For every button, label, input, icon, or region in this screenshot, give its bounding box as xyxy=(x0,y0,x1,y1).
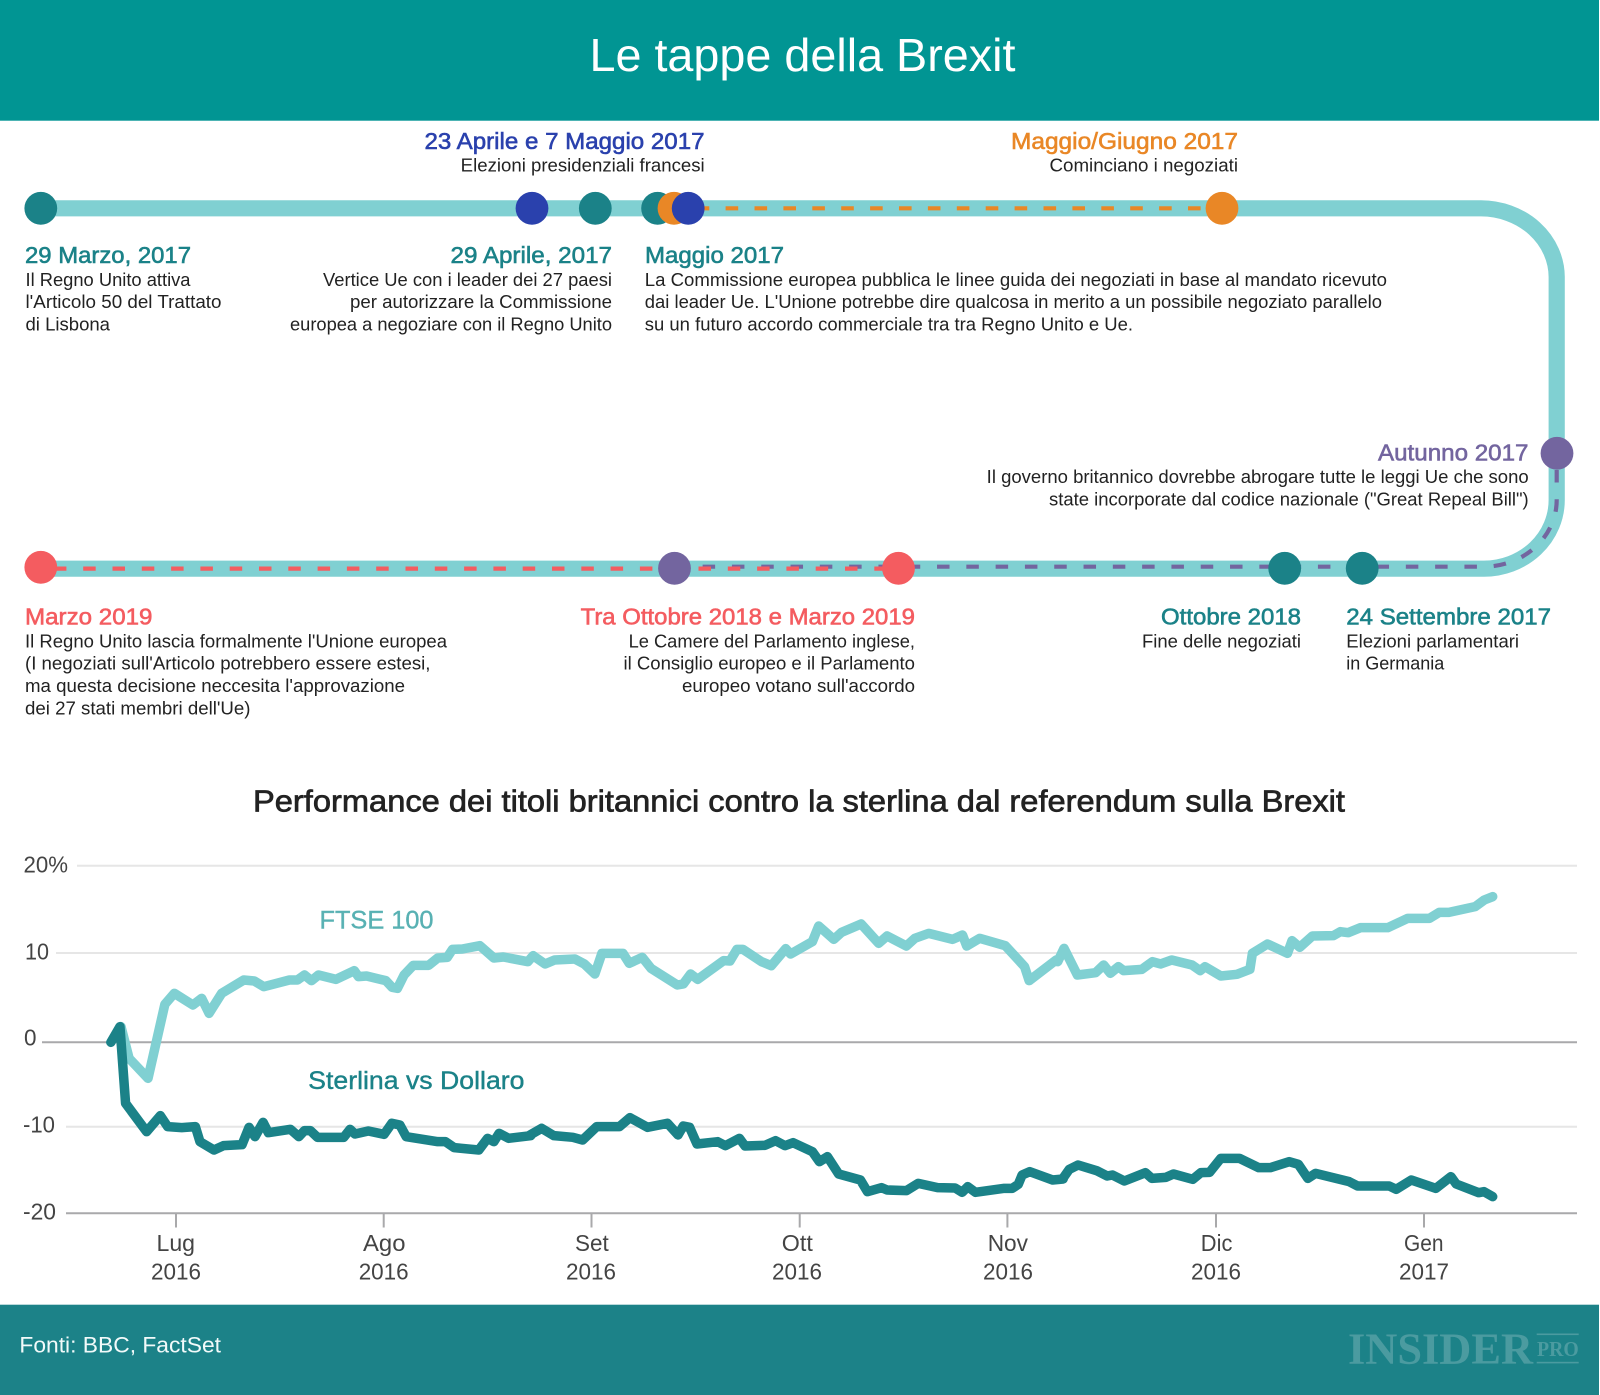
event: Autunno 2017: Autunno 2017 xyxy=(1378,440,1528,466)
x axis labels: Lug xyxy=(156,1230,195,1256)
x axis labels: Nov xyxy=(988,1230,1028,1256)
event: Marzo 2019: dei 27 stati membri dell'Ue) xyxy=(25,697,250,718)
event: Marzo 2019: ma questa decisione neccesita l'approvazione xyxy=(25,675,405,696)
event: 29 Aprile 2017: europea a negoziare con il Regno Unito xyxy=(290,314,612,334)
event: 29 Marzo 2017: 29 Marzo, 2017 xyxy=(25,242,191,268)
header band xyxy=(0,0,1599,121)
title: Le tappe della Brexit xyxy=(590,29,1016,81)
timeline track xyxy=(40,208,1557,569)
footer band xyxy=(0,1305,1599,1395)
x axis labels: 2016 xyxy=(983,1258,1033,1284)
event: Marzo 2019: Marzo 2019 xyxy=(25,603,152,629)
event: 24 Settembre 2017: 24 Settembre 2017 xyxy=(1346,603,1551,629)
event: Autunno 2017: Il governo britannico dovrebbe abrogare tutte le leggi Ue che sono xyxy=(987,466,1529,487)
event: Tra Ottobre 2018 e Marzo 2019 xyxy=(581,603,915,696)
x axis labels: Ago xyxy=(363,1230,406,1256)
event: Maggio 2017: Maggio 2017 xyxy=(645,242,784,268)
event: Ottobre 2018: Ottobre 2018 xyxy=(1161,603,1301,629)
timeline markers xyxy=(24,192,1573,585)
event: Marzo 2019 xyxy=(25,603,448,718)
y axis labels: 0 xyxy=(24,1025,36,1051)
series: Sterlina vs Dollaro xyxy=(111,1027,1493,1197)
line chart xyxy=(23,852,1577,1284)
event: Tra Ottobre 2018 e Marzo 2019: il Consiglio europeo e il Parlamento xyxy=(624,653,915,674)
event: 24 Settembre 2017: Elezioni parlamentari xyxy=(1346,630,1519,651)
event: 29 Marzo 2017: Il Regno Unito attiva xyxy=(26,269,191,290)
event: 29 Marzo 2017: l'Articolo 50 del Trattato xyxy=(26,291,221,312)
event: 23 Aprile e 7 Maggio 2017: Elezioni presidenziali francesi xyxy=(461,155,705,176)
x axis labels xyxy=(151,1230,1449,1284)
event: 29 Marzo 2017: di Lisbona xyxy=(26,314,111,334)
event: 23 Aprile e 7 Maggio 2017 xyxy=(424,128,705,176)
label: Sterlina vs Dollaro: Sterlina vs Dollaro xyxy=(308,1067,524,1095)
event: Maggio/Giugno 2017 xyxy=(1011,128,1238,176)
event: Marzo 2019: (I negoziati sull'Articolo potrebbero essere estesi, xyxy=(25,653,430,674)
event: Ottobre 2018 xyxy=(1142,603,1301,651)
event: Maggio 2017 xyxy=(645,242,1387,334)
event: Tra Ottobre 2018 e Marzo 2019: Tra Ottobre 2018 e Marzo 2019 xyxy=(581,603,915,629)
event: Ottobre 2018: Fine delle negoziati xyxy=(1142,630,1301,651)
event: 24 Settembre 2017: in Germania xyxy=(1346,653,1445,674)
logo: INSIDER PRO: INSIDER xyxy=(1348,1324,1534,1373)
event: Tra Ottobre 2018 e Marzo 2019: Le Camere del Parlamento inglese, xyxy=(629,630,915,651)
event: 29 Marzo 2017 xyxy=(25,242,221,334)
x axis labels: 2016 xyxy=(359,1258,409,1284)
event: 29 Aprile 2017: per autorizzare la Commissione xyxy=(350,291,612,312)
y axis labels: -10 xyxy=(23,1112,55,1138)
series: FTSE 100 xyxy=(121,897,1493,1078)
x axis labels: 2016 xyxy=(151,1258,201,1284)
event: 29 Aprile 2017 xyxy=(290,242,612,334)
event: Maggio 2017: La Commissione europea pubblica le linee guida dei negoziati in base al mandato ricevuto xyxy=(645,269,1387,290)
event: Maggio 2017: su un futuro accordo commerciale tra tra Regno Unito e Ue. xyxy=(645,314,1133,334)
y axis labels xyxy=(23,852,68,1224)
event: Tra Ottobre 2018 e Marzo 2019: europeo votano sull'accordo xyxy=(682,675,915,696)
y axis labels: 10 xyxy=(25,938,49,964)
dashed line: red xyxy=(54,566,885,571)
event: Autunno 2017 xyxy=(987,440,1529,510)
y axis labels: 20% xyxy=(24,852,68,878)
source note: Fonti: BBC, FactSet xyxy=(19,1333,221,1358)
event: 29 Aprile 2017: Vertice Ue con i leader dei 27 paesi xyxy=(323,269,612,290)
dashed line: purple xyxy=(674,470,1557,567)
event: Marzo 2019: Il Regno Unito lascia formalmente l'Unione europea xyxy=(25,630,448,651)
event: Maggio/Giugno 2017: Cominciano i negoziati xyxy=(1050,155,1238,176)
x axis labels: Dic xyxy=(1201,1230,1232,1256)
x axis labels: Gen xyxy=(1404,1230,1444,1256)
x axis labels: 2016 xyxy=(1191,1258,1241,1284)
event: 23 Aprile e 7 Maggio 2017: 23 Aprile e 7 Maggio 2017 xyxy=(424,128,704,154)
event: 24 Settembre 2017 xyxy=(1346,603,1551,674)
event: Autunno 2017: state incorporate dal codice nazionale ("Great Repeal Bill") xyxy=(1049,489,1529,510)
event: Maggio 2017: dai leader Ue. L'Unione potrebbe dire qualcosa in merito a un possibile negoziato parallelo xyxy=(645,291,1382,312)
x axis labels: 2017 xyxy=(1399,1258,1449,1284)
x axis labels: Set xyxy=(575,1230,609,1256)
logo: INSIDER PRO: PRO xyxy=(1537,1337,1579,1361)
x axis labels: Ott xyxy=(782,1230,813,1256)
x axis labels: 2016 xyxy=(566,1258,616,1284)
event: 29 Aprile 2017: 29 Aprile, 2017 xyxy=(450,242,612,268)
event: Maggio/Giugno 2017: Maggio/Giugno 2017 xyxy=(1011,128,1238,154)
label: FTSE 100: FTSE 100 xyxy=(320,907,434,935)
x axis labels: 2016 xyxy=(772,1258,822,1284)
y axis labels: -20 xyxy=(23,1198,56,1224)
chart heading: Performance dei titoli britannici contro la sterlina dal referendum sulla Brexit xyxy=(253,784,1345,818)
dashed line: orange negotiations xyxy=(697,206,1210,210)
